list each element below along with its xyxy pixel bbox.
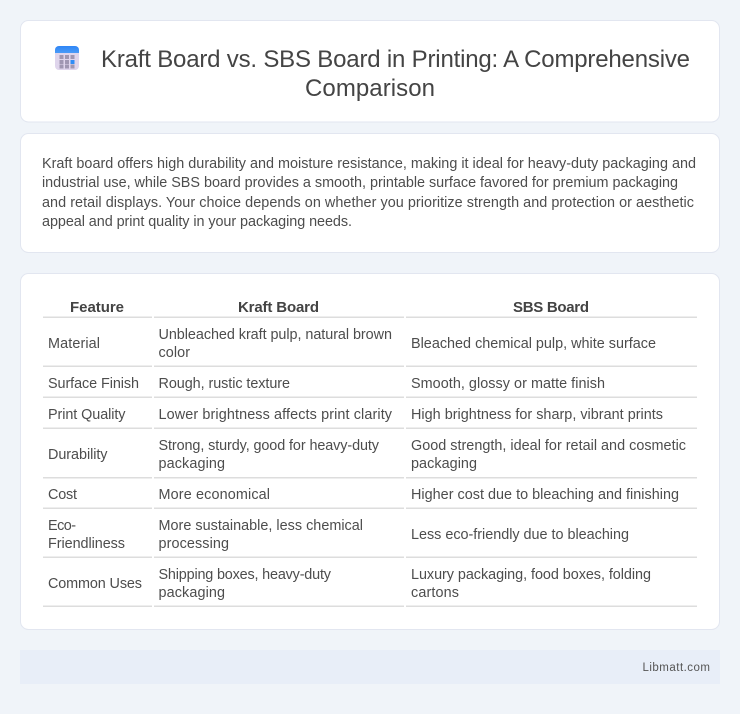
row: durability: Durability [48,447,108,463]
row: common uses: cartons [411,585,459,601]
row: surface finish: Rough, rustic texture [158,376,290,392]
text block: summary paragraph [42,156,696,230]
row: eco-friendliness: Less eco-friendly due to bleaching [411,527,629,543]
title: Comparison [305,75,435,102]
icon: calendar [55,46,79,70]
row: material: color [158,345,190,361]
row: print quality [48,407,663,423]
row: material: Material [48,336,100,352]
row: surface finish: Smooth, glossy or matte finish [411,376,605,392]
title: Kraft Board vs. SBS Board in Printing: A Comprehensive [101,46,690,73]
table header row: SBS Board [513,299,589,316]
row: common uses: Shipping boxes, heavy-duty [158,567,332,583]
row: cost [48,487,679,503]
text block: summary paragraph: industrial use, while SBS board provides a smooth, printable surface favored for premium packaging [42,175,678,191]
row: durability: packaging [158,456,225,472]
row: eco-friendliness: Eco- [48,518,76,534]
row: material: Bleached chemical pulp, white surface [411,336,656,352]
row: print quality: Print Quality [48,407,126,423]
row: durability: Strong, sturdy, good for heavy-duty [158,438,380,454]
row: durability: packaging [411,456,477,472]
row: eco-friendliness: Friendliness [48,536,125,552]
title [101,46,690,102]
row: cost: More economical [158,487,270,503]
text block: summary paragraph: appeal and print quality in your packaging needs. [42,214,352,230]
row: common uses: Common Uses [48,576,142,592]
row: common uses: Luxury packaging, food boxes, folding [411,567,651,583]
row: durability [48,438,686,472]
text block: summary paragraph: Kraft board offers high durability and moisture resistance, making it ideal for heavy-duty packaging and [42,156,696,172]
row: surface finish: Surface Finish [48,376,139,392]
panel: comparison table [20,274,720,630]
row: print quality: Lower brightness affects print clarity [158,407,393,423]
row: material [48,327,656,361]
row: cost: Higher cost due to bleaching and finishing [411,487,679,503]
table header row: Kraft Board [238,299,319,316]
row: durability: Good strength, ideal for retail and cosmetic [411,438,686,454]
row: cost: Cost [48,487,77,503]
text block: summary paragraph: and retail displays. Your choice depends on whether you prioritize strength and protection or aesthetic [42,195,694,211]
row: eco-friendliness: More sustainable, less chemical [158,518,363,534]
table header row: Feature [70,299,124,316]
row: surface finish [48,376,605,392]
row: eco-friendliness [48,518,629,552]
footer [20,650,720,684]
panel: title card [20,20,720,122]
panel: introduction [20,134,720,252]
row: common uses [48,567,651,601]
row: common uses: packaging [158,585,225,601]
table header row [70,299,589,316]
footer: Libmatt.com [642,662,710,674]
row: eco-friendliness: processing [158,536,229,552]
row: material: Unbleached kraft pulp, natural brown [158,327,392,343]
row: print quality: High brightness for sharp, vibrant prints [411,407,663,423]
